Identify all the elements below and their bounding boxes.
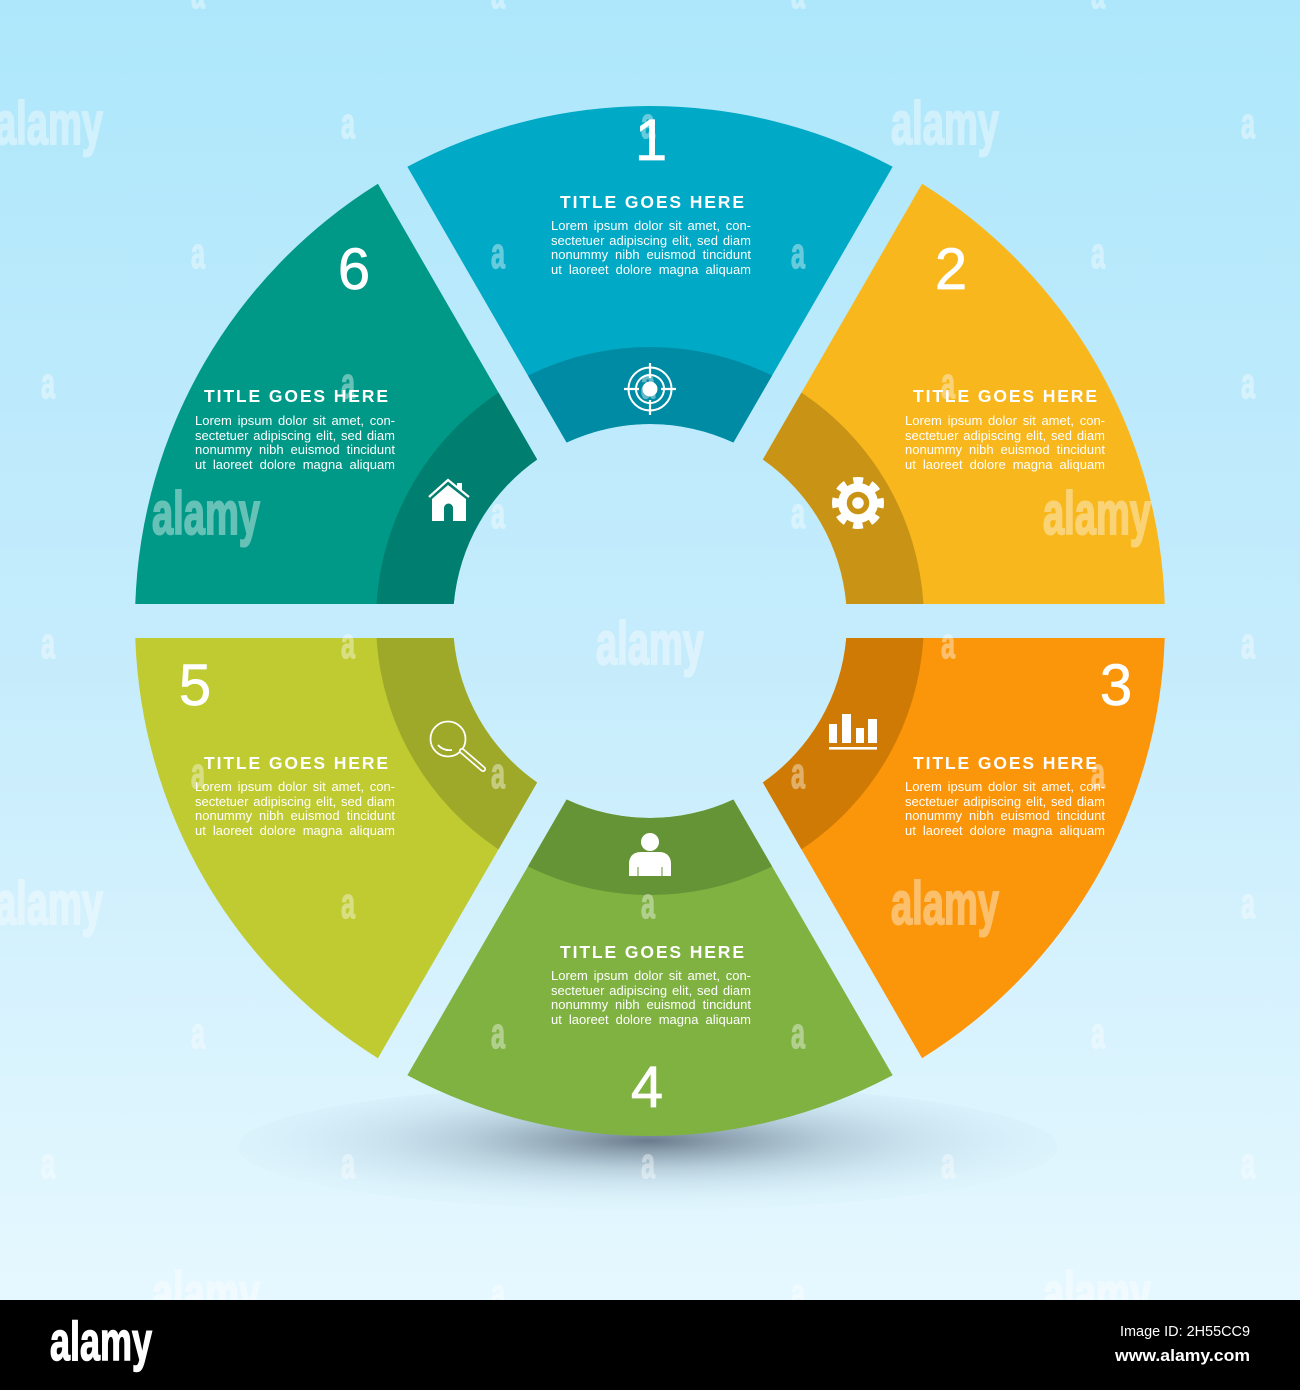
inner band 2 xyxy=(763,393,923,604)
panel: segment 6 xyxy=(135,184,537,604)
watermark overlay: a xyxy=(491,1009,505,1058)
icon: gear xyxy=(836,480,880,526)
icon: target xyxy=(624,363,676,415)
watermark overlay: a xyxy=(1241,879,1255,928)
sector 5 xyxy=(135,638,537,1058)
watermark overlay: a xyxy=(1091,749,1105,798)
number 1: 1 xyxy=(635,108,667,173)
body text 2: sectetuer adipiscing elit, sed diam xyxy=(905,428,1105,443)
watermark overlay: a xyxy=(1241,99,1255,148)
icon: house xyxy=(429,480,469,521)
watermark overlay: alamy xyxy=(596,610,704,677)
body text 5: nonummy nibh euismod tincidunt xyxy=(195,808,395,823)
sector 3 xyxy=(763,638,1165,1058)
body text 3 xyxy=(905,780,1105,840)
title 4: TITLE GOES HERE xyxy=(560,942,744,962)
watermark overlay: a xyxy=(191,1009,205,1058)
watermark overlay: a xyxy=(641,359,655,408)
watermark overlay: alamy xyxy=(891,90,999,157)
inner band 1 xyxy=(528,347,772,443)
sector 2 xyxy=(763,184,1165,604)
number 3: 3 xyxy=(1100,653,1132,718)
watermark overlay: alamy xyxy=(1043,1260,1151,1327)
body text 1: nonummy nibh euismod tincidunt xyxy=(551,247,751,262)
drop shadow xyxy=(238,1084,1058,1210)
watermark overlay: a xyxy=(791,1009,805,1058)
inner band 3 xyxy=(763,638,923,849)
panel: segment 2 xyxy=(763,184,1165,604)
watermark overlay: a xyxy=(941,359,955,408)
watermark overlay: a xyxy=(791,229,805,278)
number 5: 5 xyxy=(179,653,211,718)
title 2: TITLE GOES HERE xyxy=(913,386,1097,406)
number 2: 2 xyxy=(935,237,967,302)
watermark overlay: a xyxy=(791,1269,805,1318)
body text 6: sectetuer adipiscing elit, sed diam xyxy=(195,428,395,443)
body text 1: ut laoreet dolore magna aliquam xyxy=(551,262,751,277)
body text 4: sectetuer adipiscing elit, sed diam xyxy=(551,983,751,998)
panel: segment 5 xyxy=(135,638,537,1058)
body text 6: ut laoreet dolore magna aliquam xyxy=(195,457,395,472)
inner band 4 xyxy=(528,799,772,895)
sector 4 xyxy=(407,799,893,1136)
title 1: TITLE GOES HERE xyxy=(560,192,744,212)
watermark overlay: a xyxy=(191,229,205,278)
watermark overlay: a xyxy=(341,879,355,928)
watermark overlay: alamy xyxy=(0,870,103,937)
icon: bar chart xyxy=(829,714,877,750)
body text 4: ut laoreet dolore magna aliquam xyxy=(551,1012,751,1027)
number 4: 4 xyxy=(631,1055,663,1120)
body text 1 xyxy=(551,219,751,279)
panel: segment 4 xyxy=(407,799,893,1136)
watermark overlay: a xyxy=(641,879,655,928)
title 3: TITLE GOES HERE xyxy=(913,753,1097,773)
watermark overlay: a xyxy=(491,749,505,798)
body text 5 xyxy=(195,780,395,840)
watermark overlay: a xyxy=(1241,619,1255,668)
footer bar xyxy=(0,1300,1300,1390)
body text 1: sectetuer adipiscing elit, sed diam xyxy=(551,233,751,248)
watermark overlay: a xyxy=(641,99,655,148)
sector 6 xyxy=(135,184,537,604)
body text 2: nonummy nibh euismod tincidunt xyxy=(905,442,1105,457)
watermark overlay: alamy xyxy=(152,480,260,547)
body text 3: ut laoreet dolore magna aliquam xyxy=(905,823,1105,838)
watermark overlay: a xyxy=(641,1139,655,1188)
watermark overlay: a xyxy=(341,359,355,408)
watermark overlay: a xyxy=(41,359,55,408)
watermark overlay: a xyxy=(941,1139,955,1188)
body text 5: ut laoreet dolore magna aliquam xyxy=(195,823,395,838)
icon: magnifier xyxy=(430,722,483,769)
inner band 5 xyxy=(377,638,537,849)
watermark overlay: a xyxy=(341,99,355,148)
image id: Image ID: 2H55CC9 xyxy=(1120,1323,1250,1340)
website: www.alamy.com xyxy=(1114,1346,1250,1365)
watermark overlay: a xyxy=(341,619,355,668)
icon: person xyxy=(629,833,671,876)
body text 3: sectetuer adipiscing elit, sed diam xyxy=(905,794,1105,809)
body text 3: nonummy nibh euismod tincidunt xyxy=(905,808,1105,823)
watermark overlay: a xyxy=(791,489,805,538)
watermark overlay: alamy xyxy=(891,870,999,937)
watermark overlay: a xyxy=(1241,1139,1255,1188)
footer logo: alamy xyxy=(50,1310,152,1372)
number 6: 6 xyxy=(338,237,370,302)
panel: segment 3 xyxy=(763,638,1165,1058)
watermark overlay: a xyxy=(191,749,205,798)
title 6: TITLE GOES HERE xyxy=(204,386,388,406)
sector 1 xyxy=(407,106,893,443)
body text 2 xyxy=(905,414,1105,474)
watermark overlay: a xyxy=(1241,359,1255,408)
body text 5: sectetuer adipiscing elit, sed diam xyxy=(195,794,395,809)
body text 4 xyxy=(551,969,751,1029)
watermark overlay: a xyxy=(491,229,505,278)
body text 6: nonummy nibh euismod tincidunt xyxy=(195,442,395,457)
panel: segment 1 xyxy=(407,106,893,443)
watermark overlay: alamy xyxy=(1043,480,1151,547)
body text 6 xyxy=(195,414,395,474)
watermark overlay: a xyxy=(491,1269,505,1318)
watermark overlay: alamy xyxy=(0,90,103,157)
watermark overlay: a xyxy=(41,619,55,668)
watermark overlay: a xyxy=(1091,1009,1105,1058)
watermark overlay: a xyxy=(491,489,505,538)
inner band 6 xyxy=(377,393,537,604)
watermark overlay: a xyxy=(41,1139,55,1188)
watermark overlay: alamy xyxy=(152,1260,260,1327)
watermark overlay: a xyxy=(941,619,955,668)
watermark overlay: a xyxy=(341,1139,355,1188)
watermark overlay: a xyxy=(1091,229,1105,278)
title 5: TITLE GOES HERE xyxy=(204,753,388,773)
watermark overlay: a xyxy=(791,749,805,798)
body text 2: ut laoreet dolore magna aliquam xyxy=(905,457,1105,472)
body text 4: nonummy nibh euismod tincidunt xyxy=(551,997,751,1012)
